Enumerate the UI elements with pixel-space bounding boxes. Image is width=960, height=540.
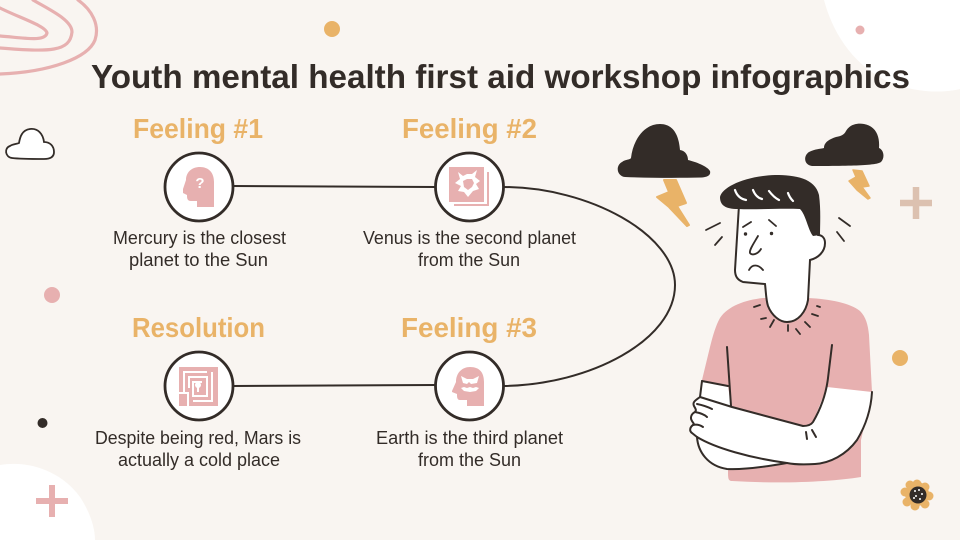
heading: feeling 3: Feeling #3 — [401, 312, 537, 343]
blob: top right white — [824, 0, 960, 92]
text: feeling 2 description — [363, 228, 576, 270]
icon: head with question mark — [165, 153, 233, 221]
icon: right lightning bolt — [849, 170, 870, 199]
text: resolution description: actually a cold place — [118, 450, 280, 470]
face details — [743, 220, 776, 270]
decoration: pink rings — [0, 0, 96, 74]
icon: head with mask — [436, 352, 504, 420]
decoration: dots — [38, 21, 908, 428]
icon: head with question mark: ? — [195, 175, 205, 192]
text: feeling 1 description: planet to the Sun — [129, 250, 268, 270]
icon: plus tan — [900, 187, 932, 219]
text: feeling 1 description — [113, 228, 286, 270]
text: feeling 3 description: from the Sun — [418, 450, 521, 470]
text: feeling 2 description: Venus is the second planet — [363, 228, 576, 248]
text: feeling 1 description: Mercury is the closest — [113, 228, 286, 248]
connector path — [233, 186, 675, 386]
panel: feeling 1 — [113, 113, 286, 270]
panel: feeling 3 — [376, 312, 563, 470]
stress marks — [706, 218, 850, 334]
blob: bottom left white — [0, 464, 95, 540]
shirt — [702, 298, 872, 482]
illustration: worried person — [690, 175, 872, 482]
panel: resolution — [95, 312, 301, 470]
text: resolution description — [95, 428, 301, 470]
icon: maze — [165, 352, 233, 420]
text: feeling 2 description: from the Sun — [418, 250, 520, 270]
text: feeling 3 description: Earth is the third planet — [376, 428, 563, 448]
panel: feeling 2 — [363, 113, 576, 270]
arms — [690, 345, 872, 469]
icon: plus pink — [36, 485, 68, 517]
icon: outline cloud — [6, 129, 54, 159]
icon: left lightning bolt — [657, 180, 689, 226]
heading: feeling 2: Feeling #2 — [402, 113, 537, 144]
title: Youth mental health first aid workshop infographics — [91, 58, 910, 95]
hair — [720, 175, 820, 236]
text: feeling 3 description — [376, 428, 563, 470]
icon: left storm cloud — [618, 124, 710, 178]
icon: right storm cloud — [805, 124, 883, 166]
icon: burst on card — [436, 153, 504, 221]
heading: feeling 1: Feeling #1 — [133, 113, 263, 144]
heading: resolution: Resolution — [132, 312, 265, 343]
head and neck — [735, 205, 825, 322]
text: resolution description: Despite being red, Mars is — [95, 428, 301, 448]
icon: flower — [900, 480, 934, 510]
